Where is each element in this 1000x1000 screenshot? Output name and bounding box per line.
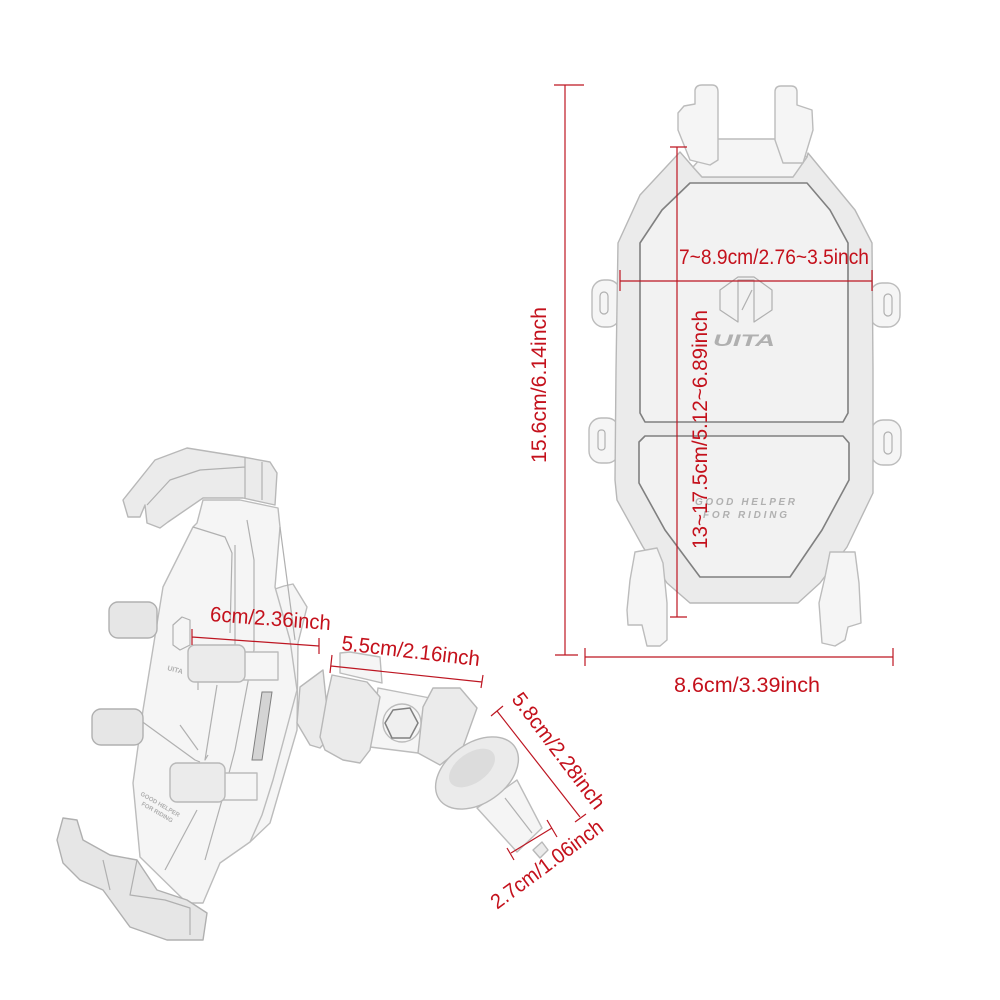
holder side body: [133, 500, 297, 903]
dimension: total height: 15.6cm/6.14inch: [528, 307, 551, 463]
side knob upper right: [870, 283, 900, 327]
stem slot: [505, 798, 532, 833]
side knob lower left: [589, 418, 619, 463]
brand mark: UITA: [713, 331, 775, 350]
dimensions: [192, 85, 893, 914]
hex bolt: [385, 708, 418, 738]
stem: [477, 780, 542, 852]
mount flange: [422, 722, 532, 824]
phone holder side view with mount arm: [57, 448, 548, 940]
lower side knob: [92, 709, 143, 745]
dimension: arm length: [330, 632, 483, 688]
upper pad: [640, 183, 848, 422]
side knob lower right: [871, 420, 901, 465]
back clip: [340, 652, 382, 683]
dimension: total height: [528, 85, 584, 655]
phone holder front view: [589, 85, 901, 646]
upper clip body: [243, 652, 278, 680]
logo side: [173, 617, 190, 650]
grip inner line: [147, 457, 262, 505]
dimension: holder width: [585, 648, 893, 697]
dimension: stem diameter: 2.7cm/1.06inch: [486, 816, 608, 914]
stem tip: [533, 842, 548, 858]
right octagon joint: [418, 688, 477, 765]
slogan line two: FOR RIDING: [703, 510, 787, 521]
top grip: [123, 448, 277, 528]
brand side: UITA: [166, 665, 184, 676]
lower pad: [639, 436, 849, 577]
card slot: [252, 692, 272, 760]
rear plate: [240, 584, 307, 842]
logo: [720, 277, 772, 322]
bottom grip: [57, 818, 207, 940]
upper side knob: [109, 602, 157, 638]
arm link: [370, 688, 430, 753]
dimension: clamp width: 7~8.9cm/2.76~3.5inch: [679, 246, 869, 269]
dimension: clamp height: [670, 147, 712, 617]
bottom right clamp: [819, 552, 861, 646]
bottom left clamp: [627, 548, 667, 646]
upper pad line: [133, 527, 232, 870]
side slogan: GOOD HELPER: [139, 792, 181, 819]
washer: [383, 704, 421, 742]
slogan: GOOD HELPER: [695, 497, 796, 508]
top right clamp: [775, 86, 813, 163]
holder body: [615, 152, 873, 603]
clamp bar: [693, 139, 807, 177]
dimension: holder depth: 6cm/2.36inch: [209, 603, 332, 635]
dimension: mount length: 5.8cm/2.28inch: [507, 688, 610, 814]
dimension: arm length: 5.5cm/2.16inch: [340, 632, 481, 671]
top left clamp: [678, 85, 718, 165]
lower clip body: [223, 773, 257, 800]
dimension: clamp height: 13~17.5cm/5.12~6.89inch: [689, 310, 712, 549]
lower clip knob: [170, 763, 225, 802]
dimension: holder width: 8.6cm/3.39inch: [674, 674, 820, 697]
side slogan line two: FOR RIDING: [140, 802, 174, 825]
dimension: clamp width: [620, 246, 872, 291]
frame lines: [205, 520, 295, 860]
upper clip knob: [188, 645, 245, 682]
side knob upper left: [592, 280, 620, 327]
left octagon joint: [320, 675, 380, 763]
dimension: holder depth: [192, 603, 332, 654]
arm back ring: [297, 670, 330, 748]
